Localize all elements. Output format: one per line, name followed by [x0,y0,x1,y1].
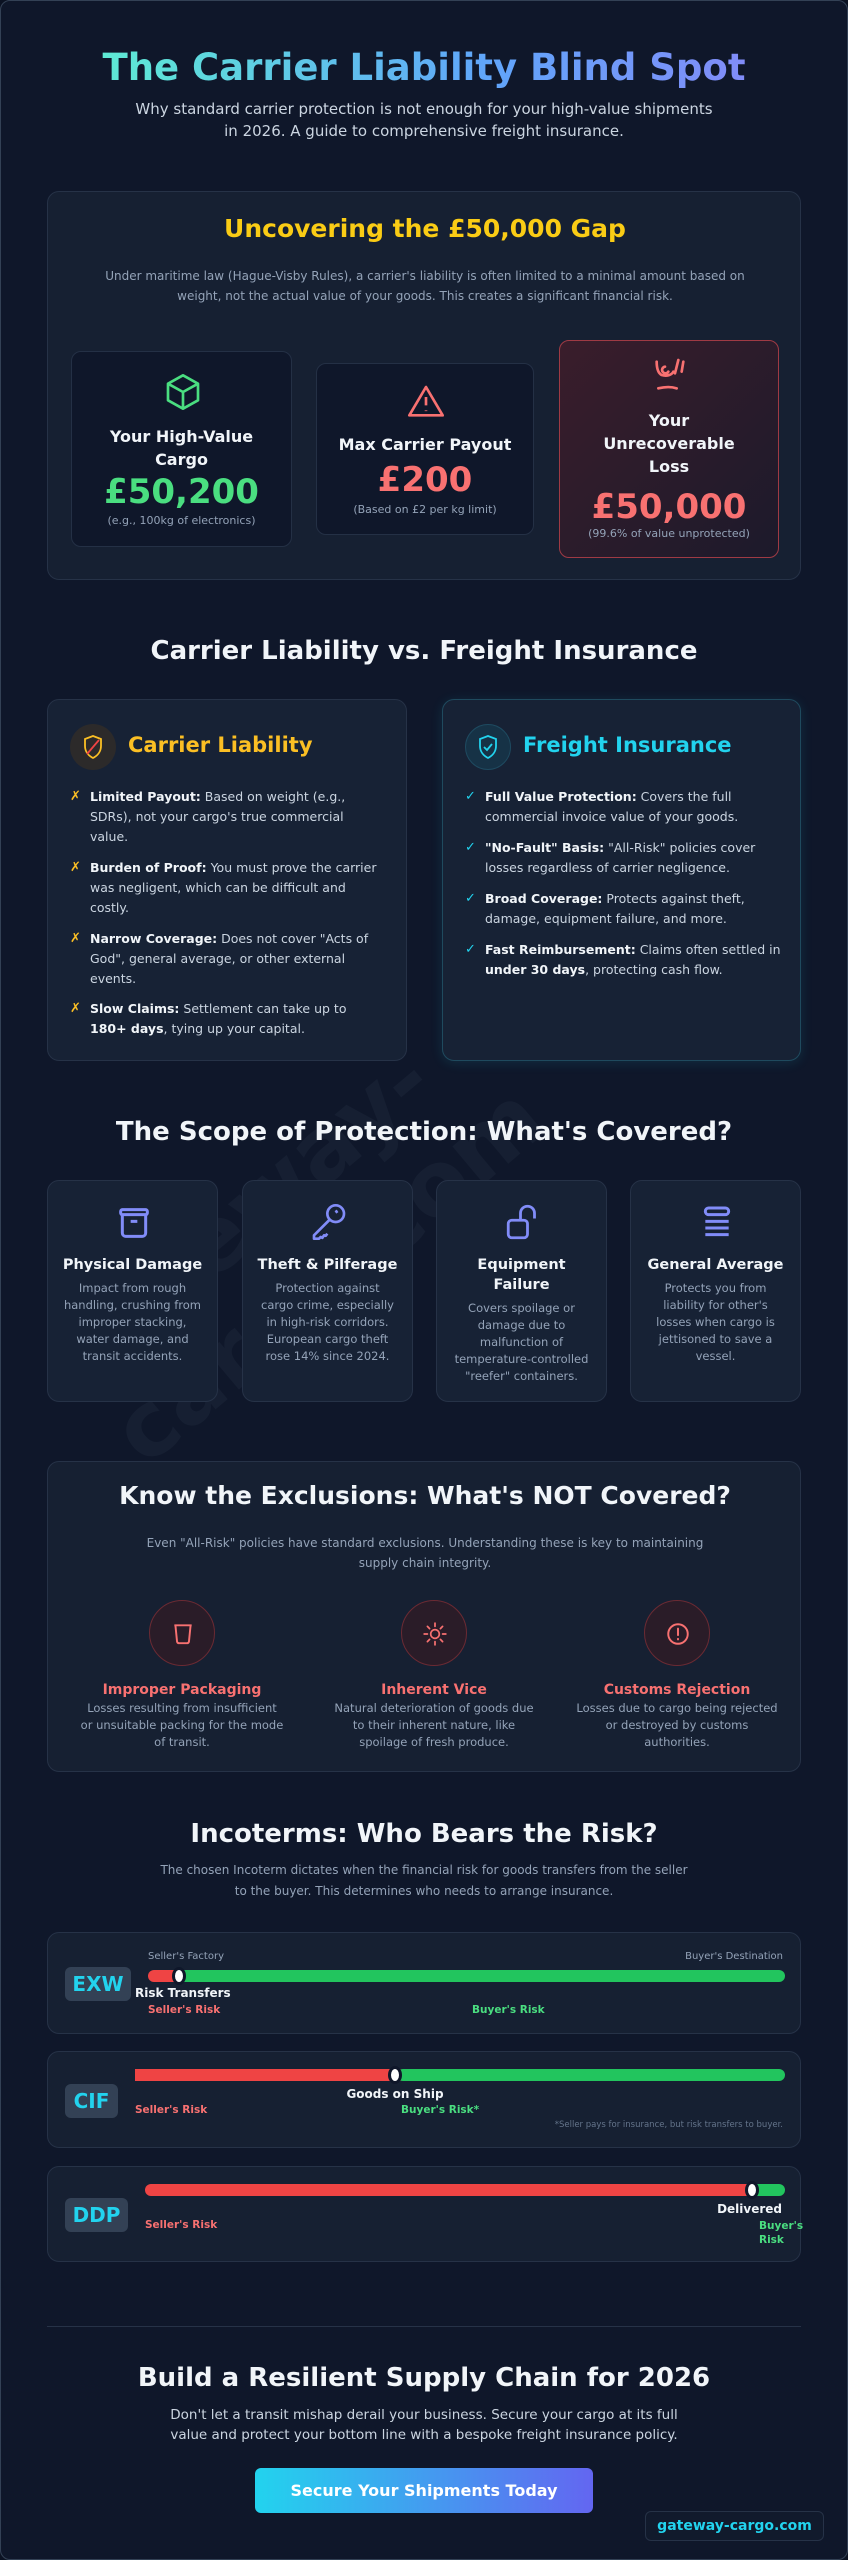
card: carrier payout: Max Carrier Payout [339,435,511,454]
badge: CIF: CIF [74,2089,109,2113]
card: equipment failure: Failure [493,1277,550,1293]
list: carrier drawbacks: Slow Claims: Settlement can take up to 180+ days, tying up your capital. [90,1001,346,1036]
card: unrecoverable loss [559,340,779,558]
icon: key [312,1204,346,1240]
list: insurance benefits: ✓ [465,840,476,855]
list: carrier drawbacks [70,789,376,1036]
heading: carrier liability: Carrier Liability [128,733,313,757]
list: carrier drawbacks: Burden of Proof: You must prove the carrier was negligent, which can be difficult and costly. [90,860,376,915]
item: improper packaging [81,1600,283,1749]
heading: comparison: Carrier Liability vs. Freight Insurance [150,636,698,666]
panel: freight insurance [442,699,801,1061]
list: insurance benefits [465,789,780,977]
badge: EXW: EXW [72,1972,124,1996]
card: carrier payout: £200 [378,460,472,500]
card: physical damage: Physical Damage [63,1257,202,1273]
badge: CIF [65,2084,118,2118]
card: cargo value [71,351,292,547]
panel: EXW [47,1932,801,2034]
panel: CIF: *Seller pays for insurance, but risk transfers to buyer. [555,2120,783,2130]
heading: incoterms: Incoterms: Who Bears the Risk? [190,1819,658,1849]
list: carrier drawbacks: Narrow Coverage: Does not cover "Acts of God", general average, or other external events. [90,931,368,986]
button: CTA: Secure Your Shipments Today [290,2481,558,2500]
card: theft: Theft & Pilferage [258,1257,397,1273]
card: equipment failure: Covers spoilage or damage due to malfunction of temperature-controlled "reefer" containers. [455,1301,588,1383]
item: improper packaging: Losses resulting from insufficient or unsuitable packing for the mode of transit. [81,1701,283,1749]
heading: CTA: Build a Resilient Supply Chain for 2026 [138,2363,710,2393]
icon: open lock [506,1204,536,1240]
panel: EXW: Seller's Factory [148,1951,224,1962]
watermark: cargo.com [92,1065,564,1485]
list: insurance benefits: ✓ [465,789,476,804]
panel: EXW: Seller's Risk [148,2004,220,2016]
item: customs rejection: Losses due to cargo being rejected or destroyed by customs authorities. [576,1701,778,1749]
footer: site badge [645,2511,824,2541]
icon: warning [408,386,444,417]
heading: gap: Uncovering the £50,000 Gap [224,214,626,243]
panel: carrier liability [47,699,407,1061]
card: unrecoverable loss: Loss [649,457,689,476]
icon: shield check [465,724,511,770]
icon: stack [704,1206,730,1236]
list: carrier drawbacks: Limited Payout: Based on weight (e.g., SDRs), not your cargo's true commercial value. [90,789,345,844]
item: inherent vice: Inherent Vice [381,1682,487,1698]
card: equipment failure: Equipment [477,1257,566,1273]
icon: cube [166,374,200,410]
footer: site badge: gateway-cargo.com [657,2518,812,2534]
icon: box [119,1208,149,1238]
list: insurance benefits: ✓ [465,942,476,957]
card: physical damage: Impact from rough handling, crushing from improper stacking, water damage, and transit accidents. [64,1281,201,1363]
card: unrecoverable loss: Unrecoverable [603,434,735,453]
badge: EXW [65,1967,131,2001]
card: carrier payout: (Based on £2 per kg limit) [353,503,497,516]
card: theft [242,1180,413,1402]
text: gap intro: Under maritime law (Hague-Visby Rules), a carrier's liability is often limited to a minimal amount based on weight, not the actual value of your goods. This creates a significant financial risk. [105,269,745,303]
card: general average: General Average [648,1257,784,1273]
panel: CIF: Goods on Ship [346,2087,444,2101]
list: insurance benefits: Broad Coverage: Protects against theft, damage, equipment failure, and more. [485,891,745,926]
card: theft: Protection against cargo crime, especially in high-risk corridors. European cargo theft rose 14% since 2024. [261,1281,394,1363]
icon: shield cross [70,724,116,770]
text: incoterms intro: The chosen Incoterm dictates when the financial risk for goods transfers from the seller to the buyer. This determines who needs to arrange insurance. [160,1863,688,1898]
list: carrier drawbacks: ✗ [70,860,81,875]
panel: DDP: Delivered [717,2202,782,2216]
card: unrecoverable loss: Your [649,411,689,430]
card: unrecoverable loss: £50,000 [592,487,746,527]
list: insurance benefits: Full Value Protection: Covers the full commercial invoice value of your goods. [485,789,738,824]
watermark: gateway- [28,1028,453,1408]
item: customs rejection [576,1600,778,1749]
panel: EXW: Risk Transfers [135,1986,231,2000]
panel: CIF [47,2051,801,2148]
panel: DDP: Seller's Risk [145,2219,217,2231]
list: carrier drawbacks: ✗ [70,931,81,946]
icon: loss [655,358,685,390]
panel: EXW: Buyer's Risk [472,2004,545,2016]
card: cargo value: (e.g., 100kg of electronics) [107,514,256,527]
panel: DDP [47,2166,801,2262]
heading: exclusions: Know the Exclusions: What's NOT Covered? [119,1481,731,1510]
heading: scope: The Scope of Protection: What's Covered? [116,1117,732,1147]
panel: CIF: Buyer's Risk* [401,2104,479,2116]
item: inherent vice [334,1600,534,1749]
item: improper packaging: Improper Packaging [103,1682,261,1698]
list: insurance benefits: "No-Fault" Basis: "All-Risk" policies cover losses regardless of carrier negligence. [485,840,755,875]
panel: CIF: Seller's Risk [135,2104,207,2116]
chart: DDP risk bar [145,2181,785,2199]
card: physical damage [47,1180,218,1402]
title: The Carrier Liability Blind Spot [102,46,746,89]
card: carrier payout [316,363,534,535]
card: general average [630,1180,801,1402]
chart: CIF risk bar [135,2066,785,2084]
badge: DDP [65,2198,128,2232]
button: CTA [255,2468,593,2513]
card: cargo value: £50,200 [104,472,259,512]
list: carrier drawbacks: ✗ [70,789,81,804]
list: carrier drawbacks: ✗ [70,1001,81,1016]
subtitle: Why standard carrier protection is not enough for your high-value shipments in 2026. A guide to comprehensive freight insurance. [135,100,713,140]
card: unrecoverable loss: (99.6% of value unprotected) [588,527,750,540]
panel: DDP: Buyer's Risk [759,2220,803,2246]
item: customs rejection: Customs Rejection [604,1682,750,1698]
card: general average: Protects you from liability for other's losses when cargo is jettisoned to save a vessel. [656,1281,775,1363]
text: exclusions intro: Even "All-Risk" policies have standard exclusions. Understanding these is key to maintaining supply chain integrity. [147,1536,703,1570]
item: inherent vice: Natural deterioration of goods due to their inherent nature, like spoilage of fresh produce. [334,1701,534,1749]
panel: EXW: Buyer's Destination [685,1951,783,1962]
list: insurance benefits: Fast Reimbursement: Claims often settled in under 30 days, protecting cash flow. [485,942,780,977]
panel: exclusions [47,1461,801,1772]
badge: DDP: DDP [73,2203,120,2227]
chart: EXW risk bar [148,1967,785,1985]
card: equipment failure [436,1180,607,1402]
list: insurance benefits: ✓ [465,891,476,906]
panel: the gap [47,191,801,580]
text: CTA body: Don't let a transit mishap derail your business. Secure your cargo at its full value and protect your bottom line with a bespoke freight insurance policy. [170,2407,678,2443]
card: cargo value: Your High-Value [110,427,253,446]
heading: freight insurance: Freight Insurance [523,733,732,757]
card: cargo value: Cargo [155,450,208,469]
